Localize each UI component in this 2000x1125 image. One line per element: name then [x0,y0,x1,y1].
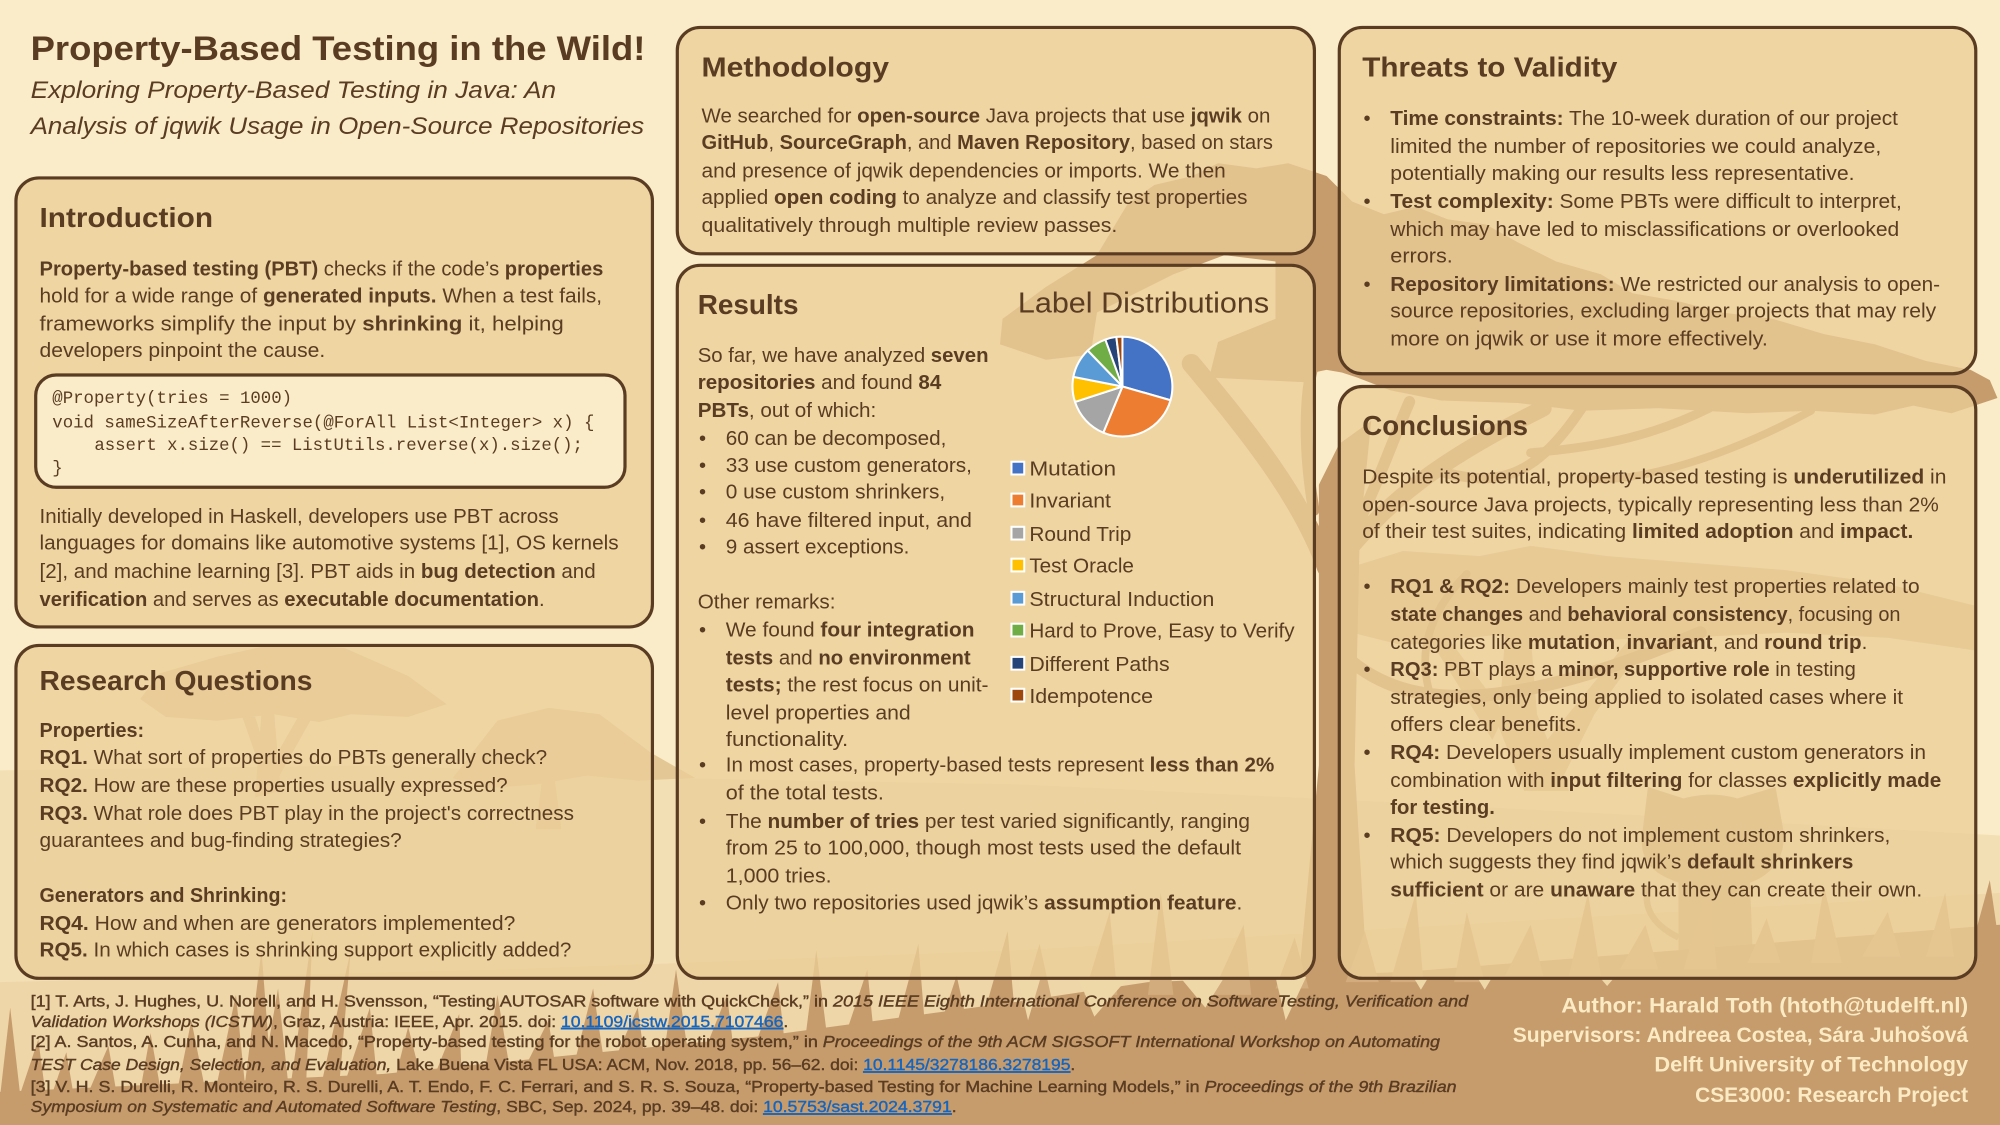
list: generator questions: Generators and Shrinking: [40,885,287,907]
text block: results summary: 33 use custom generators, [726,455,972,477]
heading: conclusions: Conclusions [1362,410,1528,441]
text block: PBT definition: developers pinpoint the cause. [40,340,325,362]
text block: PBT definition: hold for a wide range of generated inputs. When a test fails, [40,285,602,307]
references: [1] T. Arts, J. Hughes, U. Norell, and H. Svensson, “Testing AUTOSAR software with QuickCheck,” in 2015 IEEE Eighth International Conference on SoftwareTesting, Verification and [31,993,1470,1010]
list: research question answers: RQ4: Developers usually implement custom generators in [1390,742,1926,764]
legend: Test Oracle [1029,556,1134,578]
text block: other remarks [698,591,1274,914]
list: research question answers: RQ1 & RQ2: Developers mainly test properties related to [1390,576,1920,598]
author credits: Author: Harald Toth (htoth@tudelft.nl) [1561,993,1968,1018]
text block: PBT uses: [2], and machine learning [3]. PBT aids in bug detection and [40,561,596,583]
list: generator questions: RQ5. In which cases is shrinking support explicitly added? [40,940,571,962]
text block: other remarks: • [699,619,706,641]
list: research question answers: • [1364,659,1371,681]
legend: Mutation [1029,459,1116,481]
code snippet: void sameSizeAfterReverse(@ForAll List<Integer> x) { [52,414,594,433]
list: research question answers: sufficient or are unaware that they can create their own. [1390,880,1922,902]
list: research question answers: combination with input filtering for classes explicitly made [1390,770,1941,792]
list: property questions: RQ2. How are these properties usually expressed? [40,775,508,797]
list: research question answers: strategies, only being applied to isolated cases where it [1390,687,1903,709]
text block: other remarks: tests and no environment [726,648,971,670]
references: Symposium on Systematic and Automated Software Testing , SBC, Sep. 2024, pp. 39–48. doi: 10.5753/sast.2024.3791 . [31,1099,957,1116]
panel: results [677,265,1314,978]
list: threats: Test complexity: Some PBTs were difficult to interpret, [1390,191,1902,213]
text block: results summary: repositories and found 84 [698,372,942,394]
text block: results summary: • [699,510,706,532]
text block: other remarks: tests; the rest focus on unit- [726,674,989,696]
text block: methodology [702,105,1273,237]
list: research question answers: for testing. [1390,797,1495,819]
panel: introduction [16,178,652,627]
text block: other remarks: In most cases, property-based tests represent less than 2% [726,755,1274,777]
list: research question answers: • [1364,742,1371,764]
list: threats: • [1364,108,1371,130]
list: property questions: RQ3. What role does PBT play in the project's correctness [40,803,574,825]
list: research question answers: categories like mutation, invariant, and round trip. [1390,632,1867,654]
text block: other remarks: • [699,892,706,914]
legend: Hard to Prove, Easy to Verify [1029,621,1296,643]
legend: Different Paths [1029,654,1170,676]
text block: results summary: 60 can be decomposed, [726,428,946,450]
text block: results summary: • [699,482,706,504]
list: research question answers: • [1364,825,1371,847]
list: research question answers: • [1364,576,1371,598]
list: property questions: guarantees and bug-finding strategies? [40,830,402,852]
list: threats: • [1364,274,1371,296]
pie chart: label distributions [1072,337,1172,436]
code snippet: assert x.size() == ListUtils.reverse(x).size(); [94,437,583,456]
heading: results: Results [698,289,798,320]
legend [1011,459,1296,708]
text block: results summary: • [699,428,706,450]
list: research question answers: RQ3: PBT plays a minor, supportive role in testing [1390,659,1856,681]
list: threats: Time constraints: The 10-week duration of our project [1390,108,1898,130]
references: Validation Workshops (ICSTW) , Graz, Austria: IEEE, Apr. 2015. doi: 10.1109/icstw.2015.7107466 . [31,1014,788,1031]
text block: PBT uses: Initially developed in Haskell, developers use PBT across [40,506,559,528]
text block: other remarks: from 25 to 100,000, though most tests used the default [726,838,1241,860]
heading: research questions: Research Questions [40,665,312,696]
list: property questions: Properties: [40,720,144,742]
list: threats: potentially making our results less representative. [1390,163,1855,185]
title: Property-Based Testing in the Wild! [31,30,645,68]
subtitle: Exploring Property-Based Testing in Java: An [31,77,556,103]
references [31,993,1470,1116]
text block: PBT uses [40,506,619,611]
list: research question answers: RQ5: Developers do not implement custom shrinkers, [1390,825,1890,847]
list: threats: more on jqwik or use it more effectively. [1390,329,1768,351]
text block: other remarks: Other remarks: [698,591,835,613]
code snippet [36,375,625,487]
list: research question answers [1364,576,1941,902]
references: [3] V. H. S. Durelli, R. Monteiro, R. S. Durelli, A. T. Endo, F. C. Ferrari, and S. R. S. Souza, “Property-based Testing for Machine Learning Models,” in Proceedings of the 9th Brazilian [31,1079,1457,1096]
text block: other remarks: level properties and [726,702,911,724]
list: threats [1364,108,1940,351]
text block: other remarks: of the total tests. [726,783,884,805]
ground and grass [0,925,2000,1125]
author credits: Delft University of Technology [1654,1051,1968,1076]
text block: methodology: GitHub, SourceGraph, and Maven Repository, based on stars [702,132,1273,154]
text block: methodology: and presence of jqwik dependencies or imports. We then [702,160,1226,182]
legend: Structural Induction [1029,589,1214,611]
text block: other remarks: The number of tries per test varied significantly, ranging [726,811,1250,833]
big acacia tree [1000,163,1997,982]
panel: threats to validity [1339,27,1976,374]
list: generator questions [40,885,571,962]
author credits [1513,993,1969,1107]
list: property questions: RQ1. What sort of properties do PBTs generally check? [40,747,547,769]
heading: threats to validity: Threats to Validity [1362,52,1618,83]
text block: PBT definition: Property-based testing (PBT) checks if the code’s properties [40,259,603,281]
text block: methodology: qualitatively through multiple review passes. [702,215,1117,237]
references: [2] A. Santos, A. Cunha, and N. Macedo, “Property-based testing for the robot operating system,” in Proceedings of the 9th ACM SIGSOFT International Workshop on Automating [31,1034,1440,1051]
list: threats: • [1364,191,1371,213]
text block: PBT definition [40,259,603,362]
text block: methodology: We searched for open-source Java projects that use jqwik on [702,105,1270,127]
text block: conclusion summary [1362,466,1946,543]
text block: results summary: • [699,537,706,559]
title block [28,30,645,139]
legend: Invariant [1029,491,1111,513]
list: threats: Repository limitations: We restricted our analysis to open- [1390,274,1940,296]
text block: methodology: applied open coding to analyze and classify test properties [702,187,1247,209]
heading: introduction: Introduction [40,202,213,233]
text block: other remarks: 1,000 tries. [726,866,832,888]
list: threats: limited the number of repositories we could analyze, [1390,136,1881,158]
list: threats: which may have led to misclassifications or overlooked [1389,219,1899,241]
legend: Round Trip [1029,524,1131,546]
list: threats: errors. [1390,246,1453,268]
list: research question answers: offers clear benefits. [1390,714,1582,736]
list: generator questions: RQ4. How and when are generators implemented? [40,913,515,935]
text block: conclusion summary: open-source Java projects, typically representing less than 2% [1362,494,1939,516]
heading: methodology: Methodology [702,52,889,83]
distant canopy behind conclusions [1349,546,1976,791]
text block: other remarks: Only two repositories used jqwik’s assumption feature . [726,892,1242,914]
chart heading: label distributions: Label Distributions [1018,287,1269,319]
list: property questions [40,720,574,852]
text block: PBT definition: frameworks simplify the input by shrinking it, helping [40,313,564,335]
code snippet: } [52,460,63,479]
octocat silhouette [1642,787,1784,950]
list: research question answers: which suggests they find jqwik’s default shrinkers [1389,852,1853,874]
text block: results summary: 0 use custom shrinkers, [726,482,945,504]
author credits: CSE3000: Research Project [1695,1082,1968,1107]
distant tree left [140,644,695,829]
text block: results summary: So far, we have analyzed seven [698,345,989,367]
legend: Idempotence [1029,686,1153,708]
subtitle: Analysis of jqwik Usage in Open-Source Repositories [28,113,644,139]
text block: results summary [698,345,989,559]
text block: results summary: PBTs, out of which: [698,400,876,422]
author credits: Supervisors: Andreea Costea, Sára Juhošová [1513,1022,1969,1047]
text block: results summary: 46 have filtered input, and [726,510,972,532]
panel: conclusions [1339,386,1976,978]
code snippet: @Property(tries = 1000) [52,390,292,409]
text block: conclusion summary: Despite its potential, property-based testing is underutilized in [1362,466,1946,488]
list: threats: source repositories, excluding larger projects that may rely [1390,301,1937,323]
list: research question answers: state changes and behavioral consistency, focusing on [1390,604,1901,626]
text block: other remarks: • [699,811,706,833]
text block: PBT uses: verification and serves as executable documentation. [40,589,545,611]
text block: conclusion summary: of their test suites, indicating limited adoption and impact. [1362,521,1913,543]
text block: other remarks: We found four integration [726,619,974,641]
text block: other remarks: functionality. [726,729,848,751]
panel: research questions [16,645,652,978]
references: TEST Case Design, Selection, and Evaluation, Lake Buena Vista FL USA: ACM, Nov. 2018, pp. 56–62. doi: 10.1145/3278186.3278195 . [31,1057,1075,1074]
text block: results summary: • [699,455,706,477]
panel: methodology [677,27,1314,254]
text block: results summary: 9 assert exceptions. [726,537,909,559]
text block: PBT uses: languages for domains like automotive systems [1], OS kernels [40,533,619,555]
text block: other remarks: • [699,755,706,777]
subtitle [28,77,644,139]
